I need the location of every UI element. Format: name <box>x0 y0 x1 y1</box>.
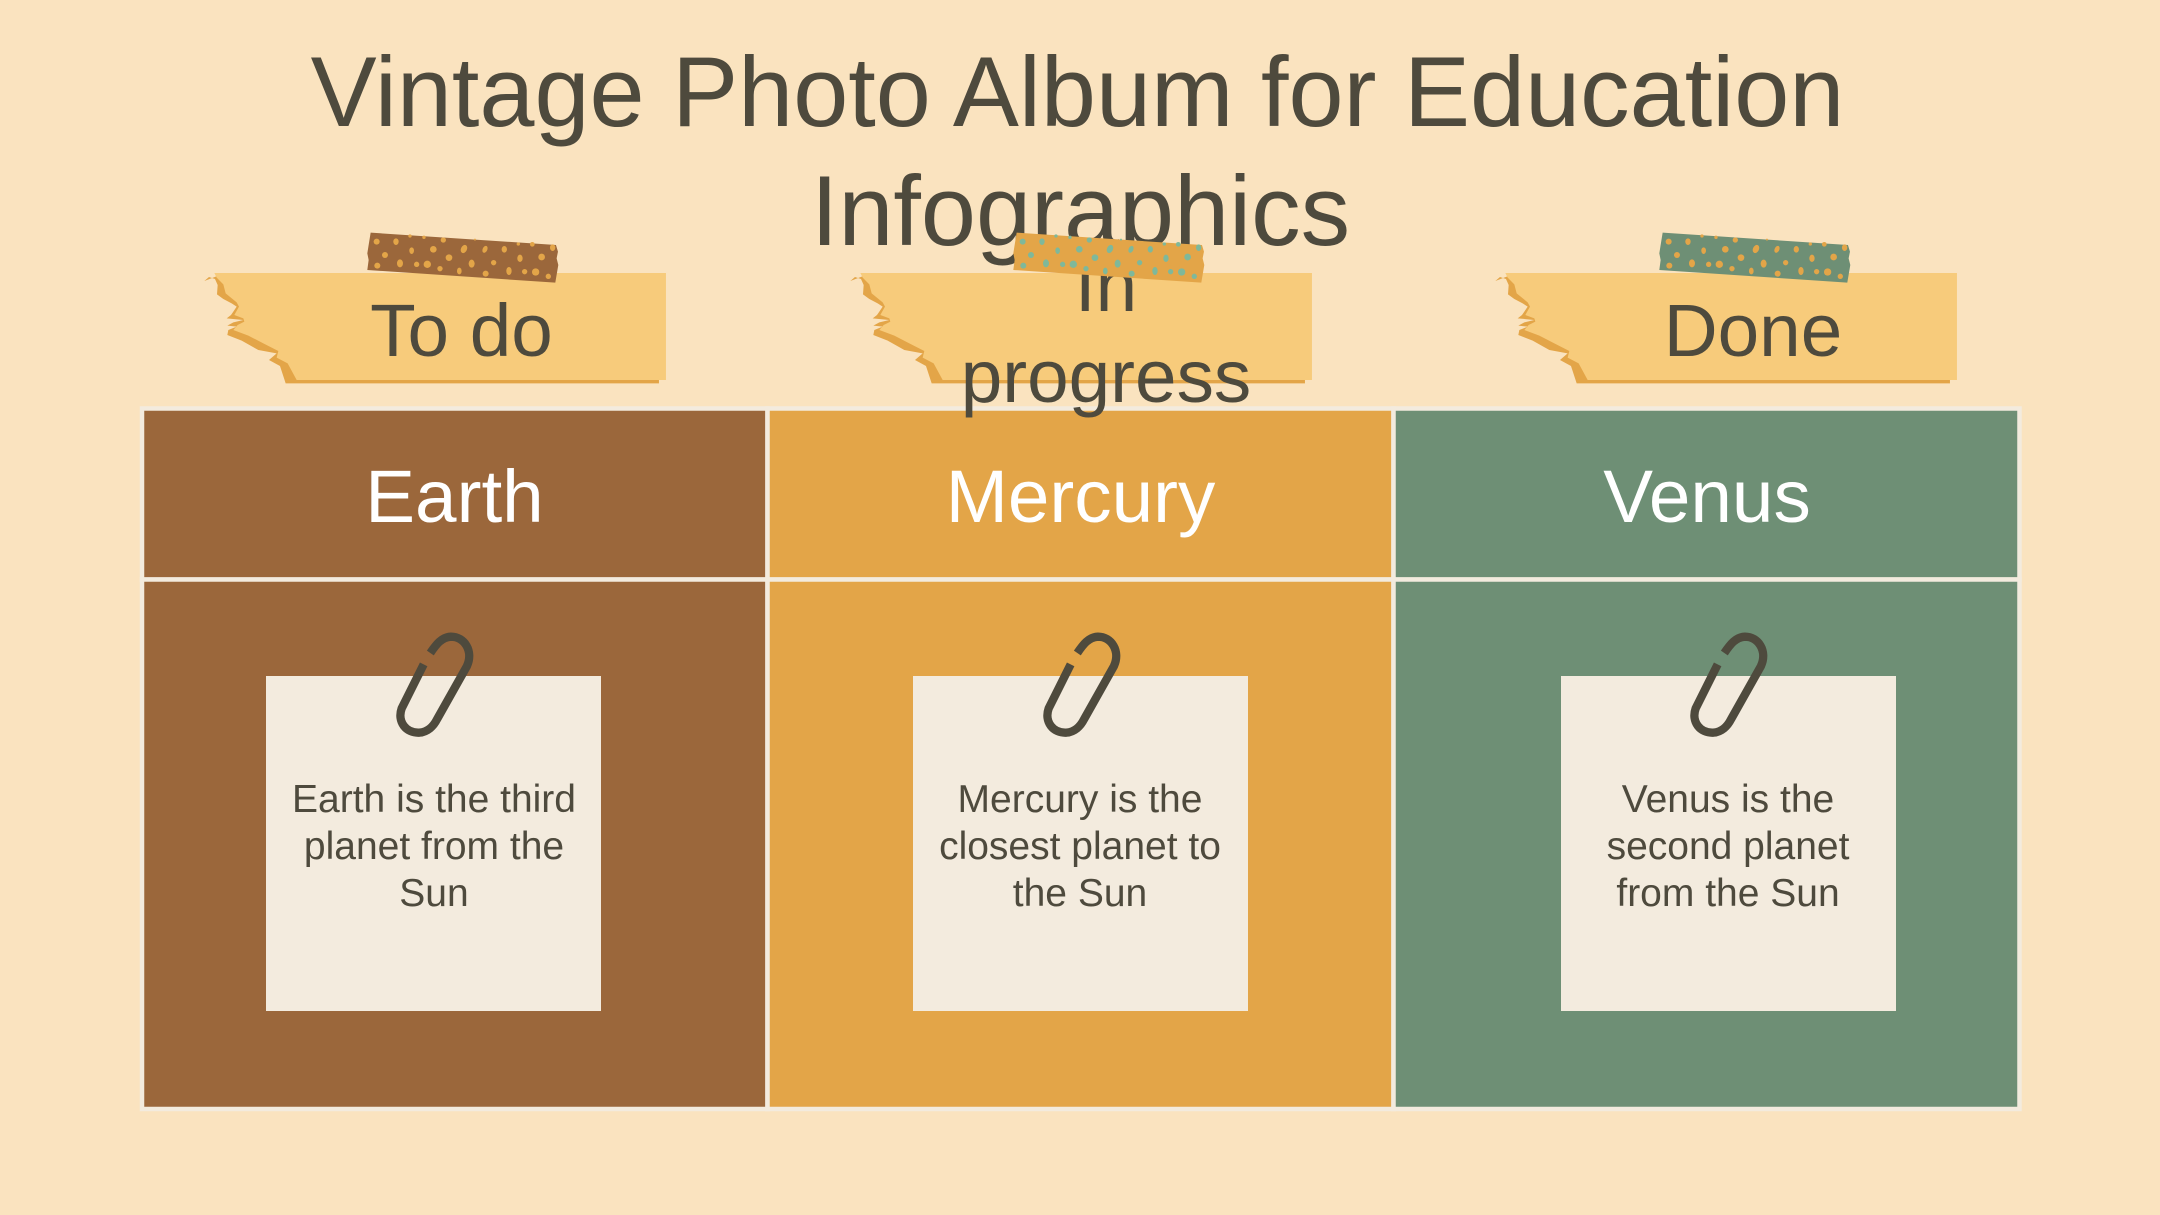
note: Earth: Earth is the third <box>292 778 576 821</box>
note: Venus: second planet <box>1607 825 1850 868</box>
note: Earth: planet from the <box>304 825 564 868</box>
note: Mercury: the Sun <box>1013 872 1147 915</box>
panel: Venus body <box>1394 580 2020 1109</box>
note: Mercury <box>913 676 1248 1011</box>
table <box>142 408 2020 1109</box>
note: Earth: Sun <box>399 872 469 915</box>
tape label: In progress <box>850 233 1312 418</box>
washi tape: orange <box>1013 233 1204 283</box>
panel: Venus header <box>1394 408 2020 580</box>
note: Mercury: Mercury is the <box>958 778 1202 821</box>
tape label: To do: To do <box>370 288 553 372</box>
title <box>311 36 1844 266</box>
note: Venus: from the Sun <box>1616 872 1840 915</box>
washi tape: brown <box>367 233 558 283</box>
washi tape: green <box>1659 233 1850 283</box>
tape label: In progress: In <box>1075 243 1137 327</box>
title: Infographics <box>811 155 1350 266</box>
icon: paperclip <box>1694 637 1763 733</box>
note: Earth <box>266 676 601 1011</box>
panel: Mercury header <box>768 408 1394 580</box>
note: Venus: Venus is the <box>1622 778 1834 821</box>
tape label: Done <box>1495 233 1957 383</box>
note: Mercury: closest planet to <box>939 825 1221 868</box>
icon: paperclip <box>1047 637 1116 733</box>
note: Venus <box>1561 676 1896 1011</box>
panel: Earth header: Earth <box>365 454 544 538</box>
icon: paperclip <box>400 637 469 733</box>
panel: Earth body <box>142 580 768 1109</box>
panel: Venus header: Venus <box>1603 454 1811 538</box>
tape label: To do <box>204 233 666 383</box>
tape label: Done: Done <box>1664 288 1842 372</box>
panel: Mercury body <box>768 580 1394 1109</box>
tape label: In progress: progress <box>961 334 1251 418</box>
title: Vintage Photo Album for Education <box>311 36 1844 147</box>
panel: Earth header <box>142 408 768 580</box>
panel: Mercury header: Mercury <box>946 454 1216 538</box>
